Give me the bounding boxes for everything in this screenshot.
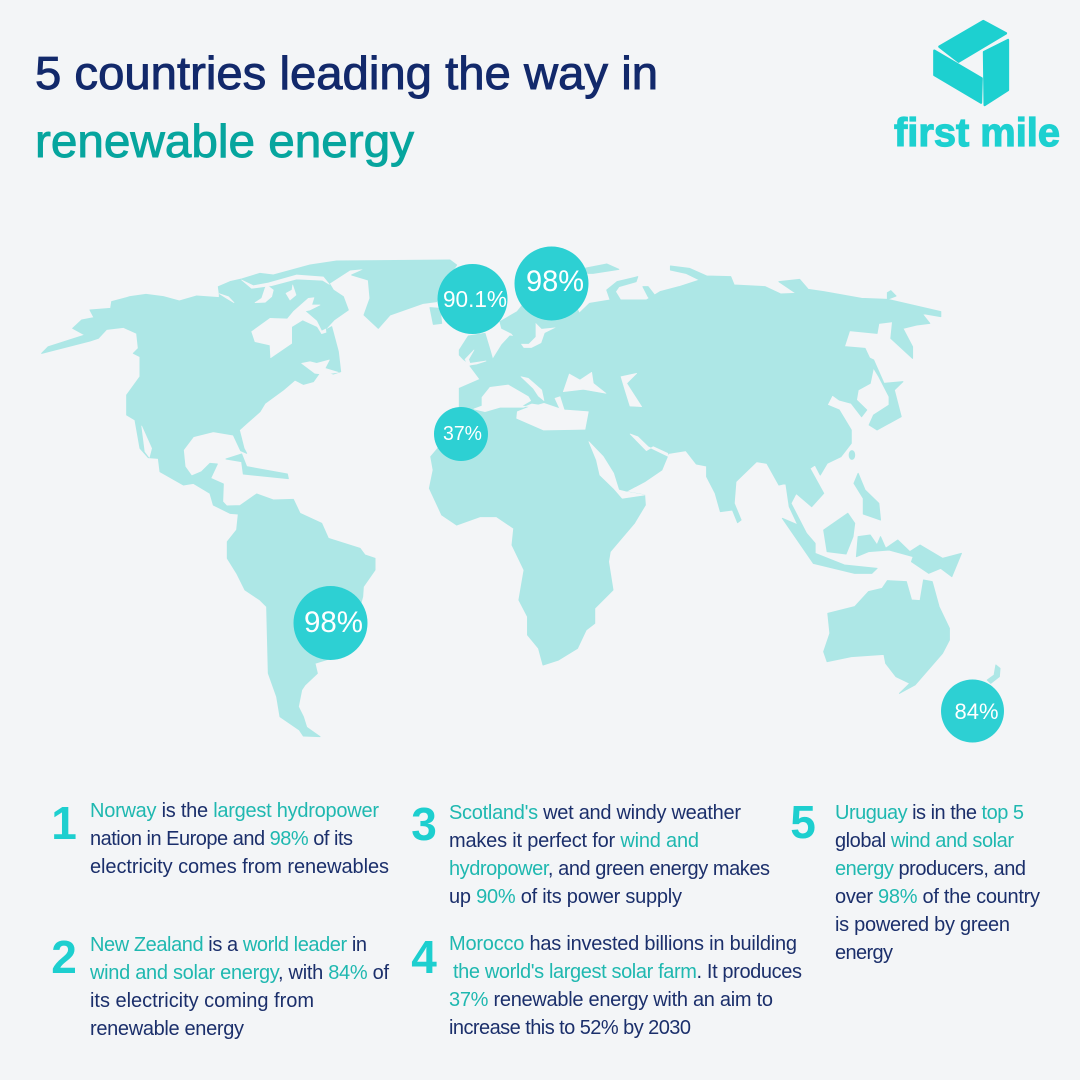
marker: Morocco 37% — [434, 407, 488, 461]
item 3: Scotland: makes it perfect for wind and — [449, 830, 699, 852]
map: Australia — [824, 580, 949, 693]
logo: first mile: first mile — [894, 111, 1060, 155]
map: Eurasia and Africa — [429, 264, 1000, 693]
item 1: Norway: nation in Europe and 98% of its — [90, 828, 353, 850]
marker: Uruguay 98%: 98% — [304, 606, 363, 639]
item 3: Scotland: Scotland's wet and windy weather — [449, 802, 741, 824]
title: 5 countries leading the way in — [35, 47, 658, 99]
item 1: Norway: electricity comes from renewables — [90, 856, 389, 878]
item 4: Morocco: 4 — [411, 931, 437, 983]
title — [35, 47, 658, 167]
item 2: New Zealand: wind and solar energy, with 84% of — [89, 962, 389, 984]
item 5: Uruguay: energy — [835, 942, 893, 964]
title: renewable energy — [35, 115, 414, 167]
marker: Norway 98% — [514, 246, 588, 320]
item 3: Scotland — [411, 798, 770, 908]
item 1: Norway — [51, 797, 389, 878]
item 4: Morocco: Morocco has invested billions in building — [449, 933, 797, 955]
map: Europe details — [459, 333, 642, 430]
map: Philippines — [854, 473, 881, 520]
item 1: Norway: Norway is the largest hydropower — [90, 800, 379, 822]
map: Japan — [867, 357, 903, 430]
item 2: New Zealand: New Zealand is a world leader in — [90, 934, 367, 956]
item 3: Scotland: 3 — [411, 798, 437, 850]
map: Novaya Zemlya — [643, 287, 664, 309]
item 2: New Zealand: its electricity coming from — [90, 990, 314, 1012]
map: Taiwan — [849, 451, 855, 459]
logo: first mile — [894, 21, 1060, 155]
marker: Norway 98%: 98% — [526, 265, 584, 298]
map: northern Scandinavia tip — [584, 264, 619, 273]
item 3: Scotland: up 90% of its power supply — [449, 886, 682, 908]
item 4: Morocco — [411, 931, 802, 1039]
marker: Uruguay 98% — [294, 586, 368, 660]
map: Iceland — [430, 308, 442, 324]
item 1: Norway: 1 — [51, 797, 77, 849]
item 2: New Zealand — [51, 931, 389, 1040]
marker: Morocco 37%: 37% — [443, 423, 482, 445]
map: Americas and Greenland — [42, 260, 457, 737]
map: New Zealand — [987, 665, 1000, 683]
map: Borneo — [824, 513, 855, 554]
marker: Scotland 90.1%: 90.1% — [443, 286, 507, 312]
marker: New Zealand 84% — [941, 680, 1004, 742]
item 5: Uruguay: global wind and solar — [835, 830, 1014, 852]
item 4: Morocco: 37% renewable energy with an aim to — [449, 989, 773, 1011]
marker: New Zealand 84%: 84% — [954, 699, 998, 724]
item 5: Uruguay: over 98% of the country — [835, 886, 1040, 908]
item 5: Uruguay: energy producers, and — [835, 858, 1026, 880]
marker: Scotland 90.1% — [438, 264, 508, 334]
item 2: New Zealand: 2 — [51, 931, 77, 983]
item 5: Uruguay — [790, 796, 1040, 964]
item 2: New Zealand: renewable energy — [90, 1018, 244, 1040]
item 4: Morocco: increase this to 52% by 2030 — [449, 1017, 691, 1039]
map: New Guinea and Sulawesi — [856, 535, 961, 577]
map: British Isles — [459, 333, 493, 364]
item 5: Uruguay: is powered by green — [835, 914, 1010, 936]
map: Wrangel Island — [887, 291, 896, 299]
map: Cuba strip — [226, 454, 288, 479]
world map — [42, 260, 1000, 737]
item 5: Uruguay: 5 — [790, 796, 816, 848]
item 3: Scotland: hydropower, and green energy makes — [449, 858, 770, 880]
item 4: Morocco: the world's largest solar farm. It produces — [453, 961, 802, 983]
item 5: Uruguay: Uruguay is in the top 5 — [835, 802, 1024, 824]
